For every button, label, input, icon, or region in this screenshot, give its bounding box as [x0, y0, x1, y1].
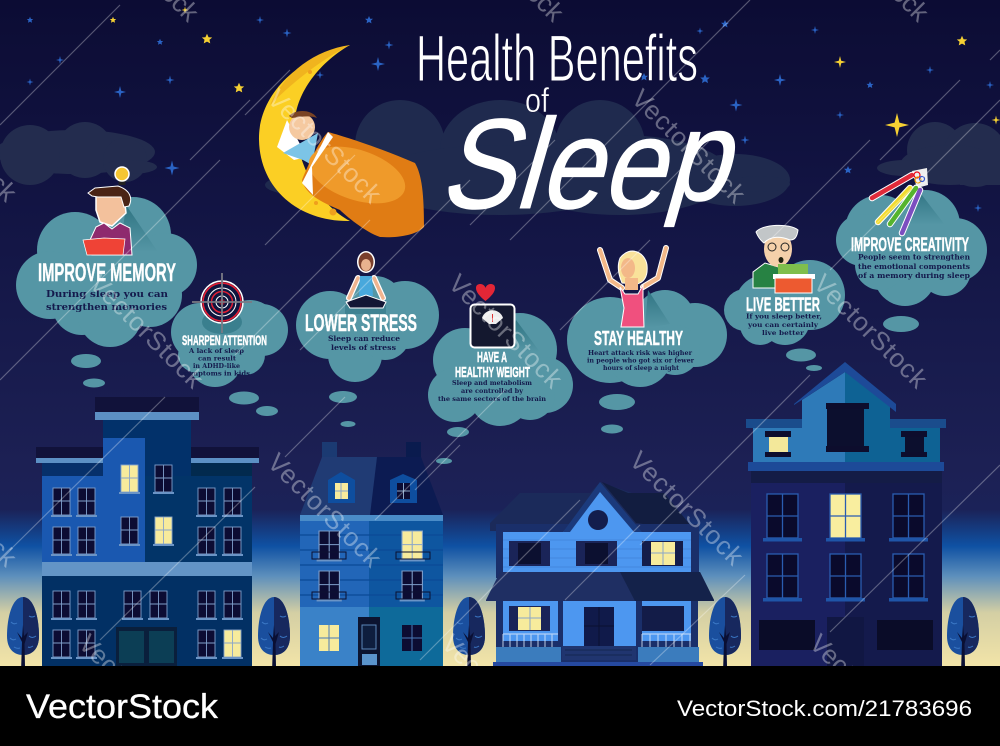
footer url text: VectorStock.com/21783696: [677, 696, 972, 721]
body text: can result: [198, 356, 236, 362]
title: Health Benefits of Sleep: p: [656, 84, 759, 227]
heading: HAVE A: [477, 349, 507, 366]
hair: [88, 186, 131, 207]
thought cloud: [567, 290, 727, 387]
orange blanket: [302, 132, 424, 237]
title: Health Benefits of Sleep: Health Benefits: [416, 21, 698, 95]
body text: A lack of sleep: [188, 348, 245, 355]
dark cloud: top left: [0, 122, 157, 185]
thought bubbles: [71, 354, 105, 388]
head: [289, 114, 315, 140]
panel: stay healthy: [567, 248, 727, 434]
grey hair: [756, 225, 798, 243]
thought cloud: [724, 260, 845, 345]
body text: [587, 350, 695, 372]
heading: HEALTHY WEIGHT: [455, 364, 530, 381]
candles: [778, 264, 808, 274]
pajama: [283, 133, 318, 165]
face: [96, 196, 126, 226]
arms: [600, 248, 666, 288]
light bulb: [115, 167, 129, 185]
watermark stock overlay: VectorStock: [808, 268, 934, 395]
icon: woman meditating: [345, 251, 386, 314]
pink dress: [620, 285, 644, 327]
watermark stock overlay: VectorStock: [73, 628, 193, 746]
panel: improve memory: [16, 167, 197, 388]
title: Health Benefits of Sleep: Slee: [430, 92, 727, 235]
blue top: [359, 276, 373, 296]
heading: [455, 349, 530, 381]
icon: weighing scale and heart: [470, 284, 540, 352]
building: tall dark apartment with attic: [746, 362, 946, 666]
title: Health Benefits of Sleep: [416, 21, 759, 235]
watermark stock overlay: VectorStock: [804, 628, 924, 746]
icon: old man with birthday cake: [753, 225, 815, 293]
heading: LOWER STRESS: [305, 310, 417, 337]
body text: you can certainly: [747, 321, 818, 329]
icon: woman raising arms: [600, 248, 670, 328]
thought cloud: [171, 300, 288, 387]
white sheet: [302, 132, 333, 195]
body text: [858, 252, 971, 280]
dark cloud: behind title: [265, 100, 790, 215]
body text: During sleep you can: [46, 289, 168, 300]
body text: live better: [762, 329, 805, 337]
body text: the same sectors of the brain: [438, 395, 546, 403]
body text: If you sleep better,: [746, 312, 822, 320]
head and hair: [357, 251, 375, 273]
body text: levels of stress: [331, 343, 396, 352]
arms: [349, 278, 383, 298]
body text: [328, 334, 400, 352]
thought bubbles: [786, 348, 822, 371]
hair: [289, 111, 317, 118]
watermark stock overlay: VectorStock: [84, 268, 210, 395]
body text: symptoms in kids: [183, 370, 251, 378]
face: [621, 258, 635, 278]
thought bubbles: [229, 392, 278, 416]
footer logo text: VectorStock: [26, 688, 219, 726]
panel: lower stress: [296, 251, 439, 427]
green jacket: [753, 263, 782, 288]
cake: [775, 278, 812, 293]
body text: [46, 289, 168, 313]
neck: [625, 278, 638, 290]
body text: [183, 348, 251, 378]
thought cloud: [296, 276, 439, 382]
thought bubble: [883, 316, 919, 332]
body text: strengthen memories: [46, 302, 167, 313]
body text: People seem to strengthen: [858, 252, 971, 262]
body text: Sleep and metabolism: [452, 379, 532, 387]
hair: [618, 251, 647, 284]
building: tall blue apartment block: [36, 397, 259, 666]
watermark stock overlay: VectorStock: [626, 83, 752, 210]
body text: [746, 312, 822, 337]
watermark stock overlay: VectorStock: [624, 445, 750, 572]
face: [764, 231, 792, 267]
body text: Sleep can reduce: [328, 334, 400, 343]
icon: crescent moon with sleeping man: [259, 45, 424, 237]
body text: Heart attack risk was higher: [588, 350, 693, 357]
blanket highlight: [302, 136, 412, 214]
body text: hours of sleep a night: [603, 365, 679, 372]
purple sweater: [90, 223, 132, 255]
body text: [438, 379, 546, 403]
crossed legs: [346, 295, 386, 308]
night stars: [26, 6, 1000, 212]
trees along the street: [7, 597, 979, 666]
watermark stock overlay: VectorStock: [262, 83, 388, 210]
icon: target: [192, 273, 252, 334]
title: Health Benefits of Sleep: of: [525, 82, 549, 120]
panel: live better: [724, 225, 845, 371]
watermark stock overlay: VectorStock: [436, 628, 556, 746]
icon: crayons and paper: [872, 168, 945, 233]
panel: improve creativity: [836, 168, 987, 332]
watermark stock overlay: VectorStock: [262, 447, 388, 574]
dark cloud: top right: [877, 122, 1000, 187]
thought cloud: [428, 313, 573, 426]
body text: of a memory during sleep: [858, 271, 970, 280]
body text: in people who got six or fewer: [587, 358, 695, 364]
watermark stock overlay: VectorStock: [443, 268, 569, 395]
thought cloud: [16, 197, 197, 347]
heading: STAY HEALTHY: [594, 328, 683, 350]
icon: man reading with light bulb: [83, 167, 158, 255]
heading: SHARPEN ATTENTION: [182, 333, 267, 348]
building: two-storey house with porch: [486, 482, 714, 666]
thought cloud: [836, 190, 987, 306]
thought bubbles: [436, 427, 469, 464]
body text: the emotional components: [858, 262, 970, 271]
heading: LIVE BETTER: [746, 295, 820, 316]
footer bar: [0, 666, 1000, 746]
panel: have a healthy weight: [428, 284, 573, 464]
building: townhouse with dormers: [300, 442, 443, 666]
body text: are controlled by: [461, 387, 523, 395]
thought bubbles: [329, 391, 357, 427]
red book: [83, 238, 125, 255]
panel: sharpen attention: [171, 273, 288, 416]
thought bubbles: [599, 394, 635, 434]
pillow: [277, 120, 307, 160]
heading: IMPROVE MEMORY: [38, 259, 176, 287]
body text: in ADHD-like: [193, 363, 240, 370]
